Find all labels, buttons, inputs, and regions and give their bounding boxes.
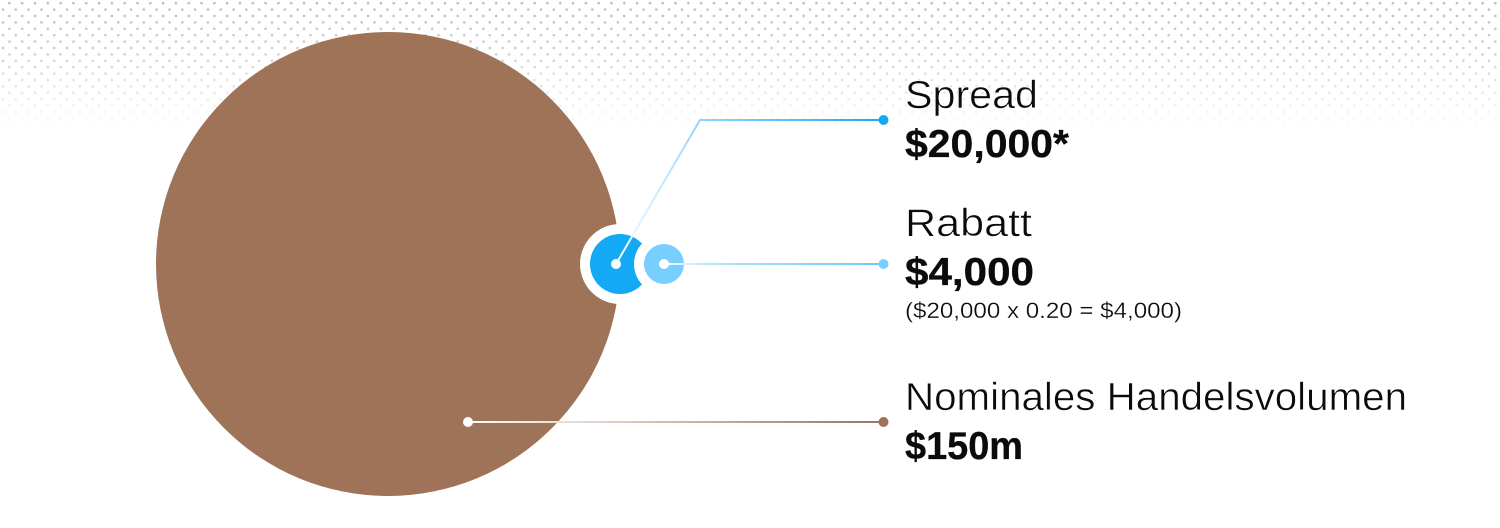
label: spread	[905, 74, 1070, 166]
label: nominal trading volume: $150m	[905, 425, 1023, 468]
connector: spread	[611, 115, 888, 269]
circle: nominal trading volume	[156, 32, 620, 496]
circle group: spread	[580, 224, 660, 304]
connector: rebate	[659, 259, 888, 269]
label: rebate: $4,000	[905, 251, 1034, 294]
label: nominal trading volume	[905, 376, 1407, 468]
label: spread: Spread	[905, 74, 1038, 117]
label: rebate: Rabatt	[905, 202, 1032, 245]
label: spread: $20,000*	[905, 123, 1070, 166]
connector: nominal trading volume	[463, 417, 888, 427]
dotted background pattern	[2, 2, 1497, 120]
label: nominal trading volume: Nominales Handelsvolumen	[905, 376, 1407, 419]
circle group: rebate	[634, 234, 694, 294]
label: rebate	[905, 202, 1182, 323]
label: rebate: ($20,000 x 0.20 = $4,000)	[905, 298, 1182, 323]
